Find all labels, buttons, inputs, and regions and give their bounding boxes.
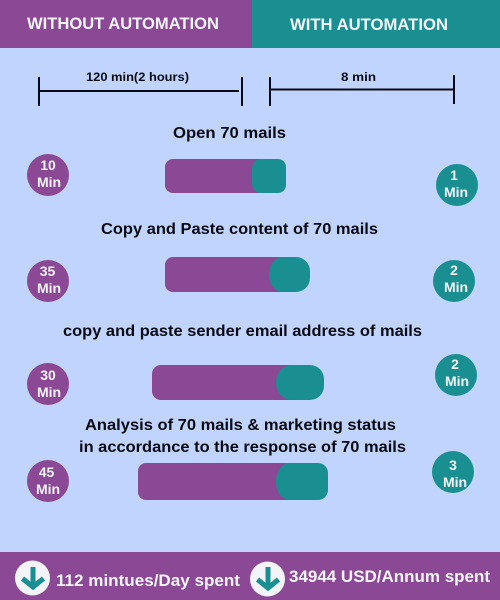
timeline: 8 min with automation: 8 min — [341, 70, 376, 84]
circle: 3 min: Min — [443, 474, 467, 490]
circle: 2 min: 2 — [450, 262, 458, 278]
panel: header — [0, 0, 500, 48]
header: with automation: WITH AUTOMATION — [290, 15, 448, 34]
circle: 2 min: Min — [445, 373, 469, 389]
heading: analysis of mails — [79, 417, 406, 456]
circle: 10 min: Min — [37, 174, 61, 190]
circle: 1 min: 1 — [450, 167, 458, 183]
circle: 30 min: 30 — [40, 367, 56, 383]
circle: 35 min — [27, 260, 69, 302]
bar: copy sender comparison — [152, 365, 324, 400]
circle: 45 min: 45 — [39, 464, 54, 480]
stat: usd per annum: 34944 USD/Annum spent — [289, 567, 490, 586]
circle: 2 min — [433, 260, 475, 302]
circle: 10 min — [27, 154, 69, 196]
circle: 3 min: 3 — [449, 457, 457, 473]
timeline: 8 min with automation — [270, 70, 454, 106]
circle: 45 min — [27, 460, 69, 502]
bar: open mails comparison — [165, 159, 286, 193]
timeline: 120 min without automation: 120 min(2 hours) — [86, 70, 189, 84]
header: without automation: WITHOUT AUTOMATION — [27, 14, 219, 33]
heading: copy and paste content: Copy and Paste content of 70 mails — [101, 221, 378, 238]
heading: analysis of mails: in accordance to the response of 70 mails — [79, 439, 406, 456]
icon: down arrow, cost — [250, 562, 285, 596]
panel: footer — [0, 552, 500, 600]
circle: 45 min: Min — [36, 481, 60, 497]
bar: copy content comparison — [165, 257, 310, 292]
circle: 1 min: Min — [444, 184, 468, 200]
heading: open 70 mails: Open 70 mails — [173, 125, 286, 142]
circle: 35 min: 35 — [40, 263, 55, 279]
timeline: 120 min without automation — [39, 70, 242, 106]
circle: 2 min: Min — [444, 279, 468, 295]
heading: analysis of mails: Analysis of 70 mails & marketing status — [85, 417, 396, 434]
circle: 30 min: Min — [37, 384, 61, 400]
circle: 30 min — [27, 363, 69, 405]
bar: analysis comparison — [138, 463, 328, 500]
icon: down arrow, time — [15, 560, 50, 596]
circle: 2 min — [435, 354, 477, 396]
circle: 1 min — [436, 164, 478, 206]
header: with automation — [252, 0, 500, 48]
circle: 10 min: 10 — [40, 157, 56, 173]
stat: minutes per day: 112 mintues/Day spent — [56, 571, 240, 590]
header: without automation — [0, 0, 252, 48]
heading: copy sender address: copy and paste sender email address of mails — [63, 323, 422, 340]
circle: 2 min: 2 — [451, 356, 459, 372]
circle: 35 min: Min — [37, 280, 61, 296]
circle: 3 min — [432, 451, 474, 493]
